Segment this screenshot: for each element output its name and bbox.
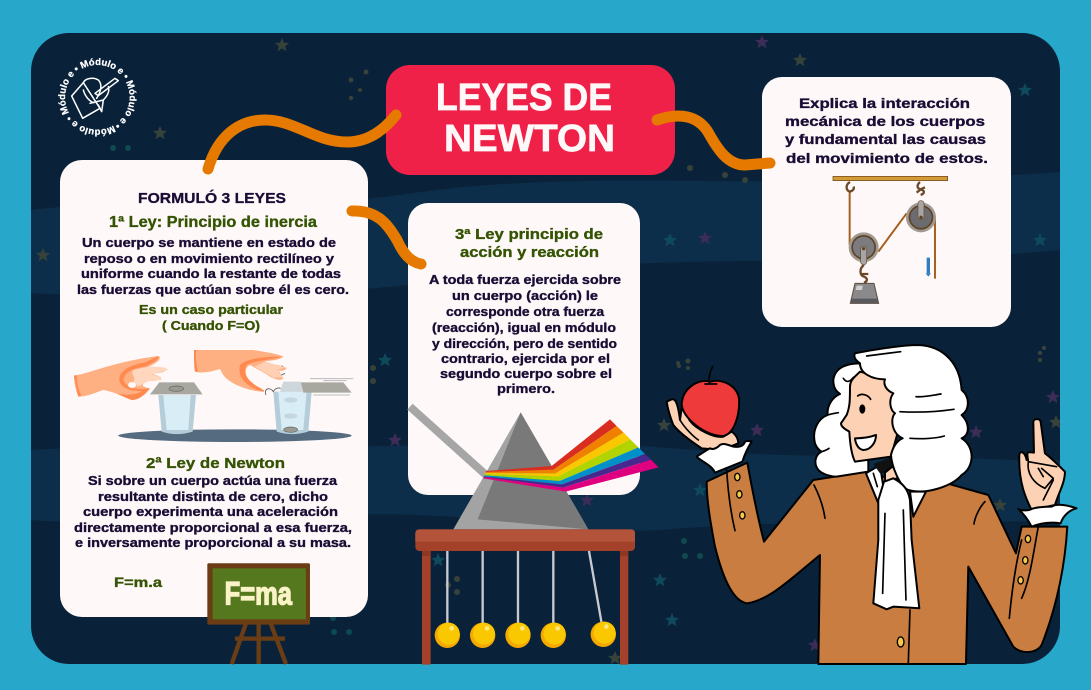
finger lines — [1027, 453, 1057, 500]
wig — [854, 345, 972, 491]
text: first law description: reposo o en movimiento rectilíneo y — [84, 252, 334, 266]
logo: Modulo e badge: Módulo e • Módulo e • Módulo e • Módulo e • — [58, 58, 137, 137]
connector: title to explanation panel — [657, 116, 770, 165]
title box — [386, 65, 675, 175]
face — [841, 372, 905, 462]
text: explanation: del movimiento de estos. — [786, 150, 988, 166]
collar and scarf — [866, 465, 926, 517]
heading: third law — [455, 227, 603, 261]
right hand — [1019, 419, 1065, 510]
right cuff — [1018, 505, 1077, 527]
text: first law description: las fuerzas que actúan sobre él es cero. — [77, 283, 349, 297]
text: third law description: contrario, ejercida por el — [441, 352, 610, 366]
text: second law description: Si sobre un cuerpo actúa una fuerza — [88, 474, 338, 488]
illustration: prism with rainbow — [410, 407, 659, 529]
formula: F=m.a: F=m.a — [114, 575, 163, 590]
text: third law description: un cuerpo (acción) le — [452, 289, 598, 303]
heading: third law: acción y reacción — [460, 245, 599, 261]
text: second law description: e inversamente proporcional a su masa. — [75, 536, 351, 550]
coat — [707, 463, 1067, 664]
text: second law description: resultante distinta de cero, dicho — [98, 490, 328, 504]
scarf — [873, 478, 919, 609]
text: second law description: cuerpo experimenta una aceleración — [83, 505, 338, 519]
title text — [436, 77, 615, 160]
text: third law description: corresponde otra fuerza — [446, 305, 605, 319]
panel: explanation with pulley — [762, 77, 1011, 327]
apple — [682, 381, 739, 436]
text: second law description — [74, 474, 352, 550]
left hand — [667, 399, 738, 450]
hair curls — [822, 377, 853, 452]
panel: laws 1 and 2 — [60, 160, 368, 617]
text: first law description: uniforme cuando la restante de todas — [81, 267, 341, 281]
illustration: pulley system — [833, 176, 948, 303]
hair back — [814, 363, 868, 477]
text: explanation: Explica la interacción — [799, 95, 970, 111]
heading: second law: 2ª Ley de Newton — [146, 455, 285, 472]
icon: blackboard with formula — [207, 563, 310, 664]
heading: first law: 1ª Ley: Principio de inercia — [109, 214, 317, 231]
wig curls — [867, 352, 954, 439]
scarf folds — [873, 473, 906, 600]
text: explanation: mecánica de los cuerpos — [785, 113, 985, 129]
coat seams — [727, 470, 1038, 663]
left hand with apple — [667, 367, 752, 473]
illustration: Isaac Newton with apple — [667, 345, 1077, 664]
panel: third law — [408, 203, 640, 495]
text: particular case — [139, 303, 283, 333]
text: third law description: y dirección, pero de sentido — [432, 337, 617, 351]
icon: blackboard with formula: F=ma — [225, 576, 292, 612]
text: third law description: primero. — [497, 382, 555, 396]
text: first law description: Un cuerpo se mantiene en estado de — [82, 236, 336, 250]
text: third law description: (reacción), igual en módulo — [432, 321, 616, 335]
head with wig — [814, 345, 972, 491]
coat buttons — [735, 473, 1031, 647]
neck skin — [885, 467, 903, 482]
text: first law description — [77, 236, 349, 297]
smile — [855, 435, 876, 450]
text: second law description: directamente proporcional a esa fuerza, — [74, 521, 352, 535]
text: third law description: A toda fuerza ejercida sobre — [429, 273, 621, 287]
text: explanation: y fundamental las causas — [785, 131, 986, 147]
heading: third law: 3ª Ley principio de — [455, 227, 603, 243]
title text: NEWTON — [444, 118, 615, 160]
left cuff — [697, 441, 752, 473]
apple stem — [680, 367, 717, 440]
eye and brow — [858, 394, 871, 414]
illustration: Newton's cradle — [415, 529, 635, 665]
title text: LEYES DE — [436, 77, 612, 119]
right hand with cuff — [1018, 419, 1077, 527]
text: third law description: segundo cuerpo sobre el — [440, 367, 612, 381]
panel heading: three laws: FORMULÓ 3 LEYES — [138, 189, 286, 207]
text: particular case: Es un caso particular — [139, 303, 283, 317]
neck — [873, 457, 894, 473]
illustration: coin inertia experiment — [74, 350, 353, 442]
connector: title to left panel — [208, 115, 396, 169]
text: particular case: ( Cuando F=O) — [162, 319, 260, 333]
text: explanation — [785, 95, 988, 166]
connector: left panel to third law panel — [352, 211, 421, 264]
text: third law description — [429, 273, 621, 396]
